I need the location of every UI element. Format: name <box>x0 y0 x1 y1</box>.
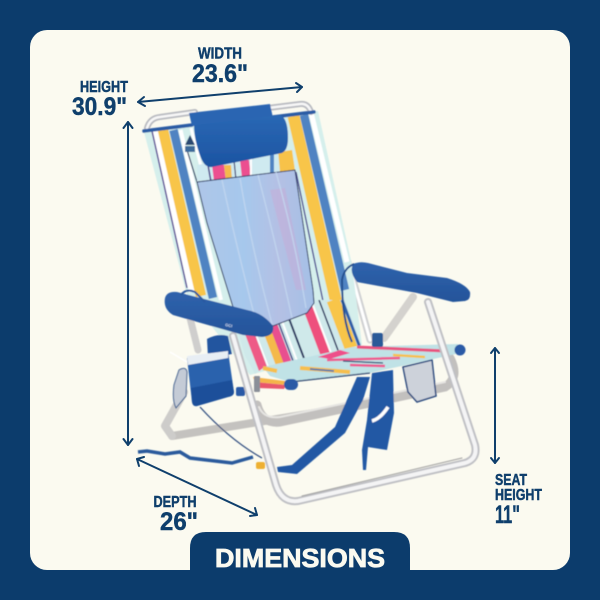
title tab <box>190 532 410 571</box>
front leg frame <box>233 302 476 501</box>
grey pouch <box>403 360 436 402</box>
left stripes <box>152 128 221 300</box>
headrest stripe strip <box>196 150 296 182</box>
label: width <box>192 46 248 88</box>
mesh tint <box>270 188 306 290</box>
back frame and rear legs <box>165 262 454 436</box>
label: depth: DEPTH <box>154 494 196 511</box>
right armrest <box>352 262 470 302</box>
left arm strap loop <box>181 291 205 302</box>
mesh folds <box>222 172 306 324</box>
seat tube caps and clamps <box>236 333 466 396</box>
mesh pocket <box>197 170 314 326</box>
right stripes <box>294 112 347 325</box>
right arm strap loop <box>342 264 354 342</box>
label: height: 30.9" <box>72 93 127 121</box>
left armrest <box>165 292 273 337</box>
arrow: width <box>138 83 302 106</box>
label: width: 23.6" <box>192 60 248 88</box>
pillow <box>194 115 288 167</box>
arrow: depth <box>137 457 257 516</box>
label: depth: 26" <box>160 508 198 536</box>
back fabric <box>144 111 362 375</box>
icon: brand logo <box>185 135 195 152</box>
top frame bar and band <box>144 104 314 131</box>
cup holder bag <box>170 335 234 408</box>
label: width: WIDTH <box>198 46 242 62</box>
lower back striped fabric <box>244 299 362 372</box>
label: height: HEIGHT <box>80 79 128 96</box>
chair illustration <box>138 104 476 501</box>
arrow: height <box>124 122 132 445</box>
arrow: seat height <box>491 348 499 463</box>
label: seat height: HEIGHT <box>495 487 542 504</box>
headrest flap <box>189 104 273 126</box>
seat fabric <box>253 344 458 389</box>
straps <box>138 370 394 474</box>
label: height <box>72 79 128 121</box>
label: seat height: 11" <box>495 501 520 529</box>
label: seat height <box>495 472 542 529</box>
label: seat height: SEAT <box>495 472 527 489</box>
left arm label: GCI <box>225 322 233 328</box>
title: DIMENSIONS <box>215 543 385 573</box>
label: depth <box>154 494 198 536</box>
